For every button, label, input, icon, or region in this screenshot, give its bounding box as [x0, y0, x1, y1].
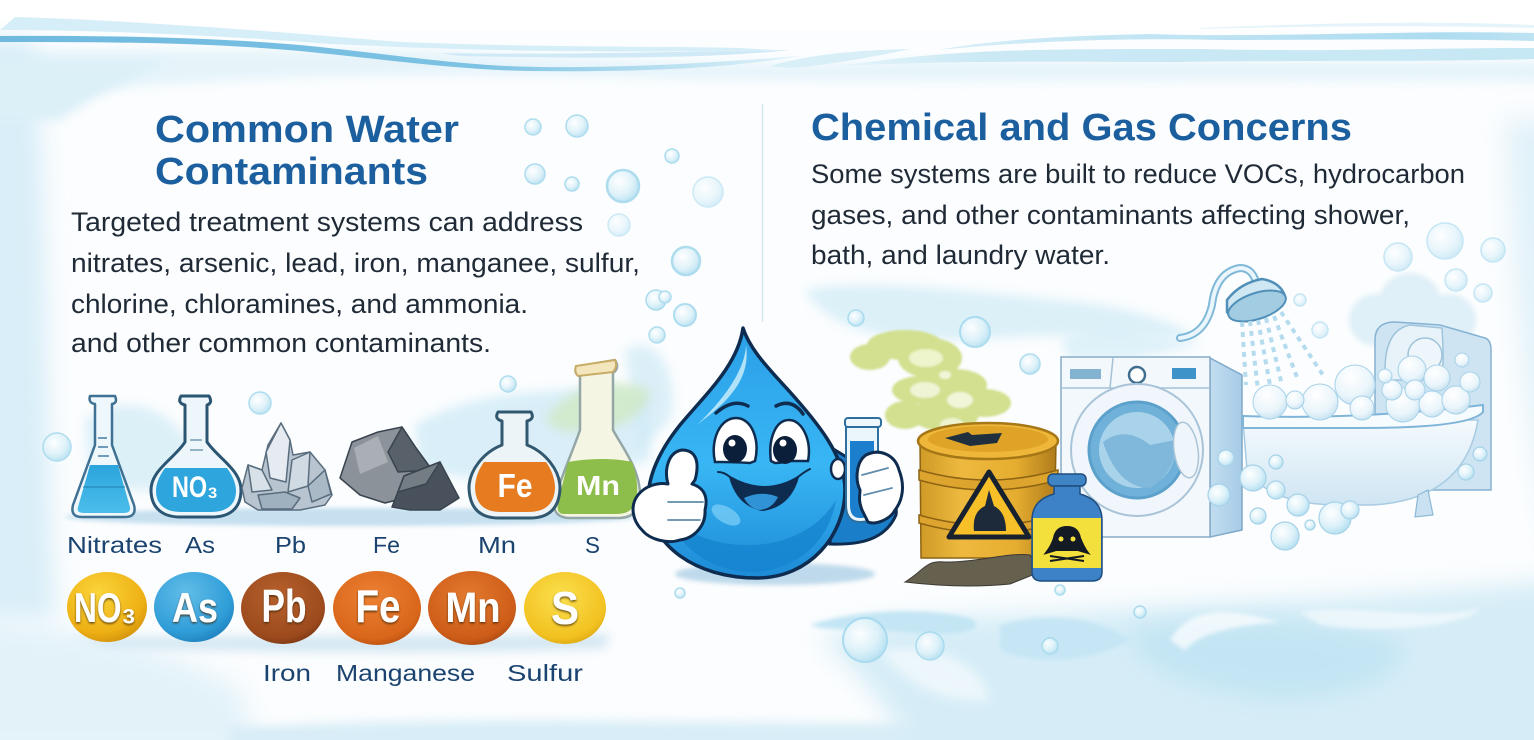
text block: targeted treatment description: chlorine, chloramines, and ammonia.: [71, 289, 528, 319]
heading: common water contaminants: Contaminants: [155, 151, 428, 193]
test tube: [845, 418, 881, 522]
floating bubbles: [43, 115, 1505, 662]
soap bubbles: [1253, 353, 1480, 422]
icon: Mn flask: Mn: [576, 470, 620, 501]
labels: symbol row: Pb: [275, 532, 306, 558]
bathtub with soap foam: [1208, 273, 1491, 550]
labels: symbol row: Mn: [478, 532, 516, 558]
text block: targeted treatment description: [71, 207, 640, 358]
text block: chemical and gas description: bath, and laundry water.: [811, 240, 1110, 270]
center divider: [762, 104, 764, 322]
sphere: As: [154, 572, 234, 642]
panel: contaminant flasks and minerals: [65, 360, 650, 526]
labels: symbol row: S: [585, 532, 600, 558]
text block: chemical and gas description: gases, and other contaminants affecting shower,: [811, 200, 1410, 230]
sphere: NO3: [67, 572, 147, 642]
floor bubbles: [1208, 447, 1487, 550]
text block: targeted treatment description: and other common contaminants.: [71, 328, 491, 358]
panel: element spheres: [67, 571, 610, 652]
gas cloud: [850, 330, 1011, 439]
icon: nitrates flask: [72, 396, 135, 517]
sphere: S: S: [551, 582, 579, 634]
icon: lead crystal cluster: [242, 423, 332, 510]
sphere: Pb: Pb: [262, 580, 306, 632]
icon: iron ore rocks: [340, 427, 459, 510]
labels: symbol row: Fe: [373, 532, 400, 558]
heading: chemical and gas concerns: Chemical and Gas Concerns: [811, 107, 1352, 149]
icon: Mn flask: [554, 360, 640, 518]
icon: poison bottle: [1032, 474, 1102, 581]
labels: symbol row: As: [185, 532, 215, 558]
sphere: NO3: NO₃: [74, 584, 136, 631]
labels: symbol row: Nitrates: [67, 532, 162, 558]
icon: hazard triangle: [949, 472, 1029, 537]
text block: targeted treatment description: nitrates, arsenic, lead, iron, manganee, sulfur,: [71, 248, 640, 278]
mascot: water drop with thumbs up and test tube: [633, 328, 902, 585]
barrel: [918, 423, 1058, 558]
heading: common water contaminants: [155, 109, 459, 193]
sphere: As: As: [172, 584, 218, 631]
icon: NO3 flask: [151, 396, 241, 517]
sphere: S: [524, 572, 606, 644]
text block: chemical and gas description: Some systems are built to reduce VOCs, hydrocarbon: [811, 159, 1465, 189]
sphere: Mn: Mn: [446, 584, 500, 632]
labels: element names: Iron: [263, 660, 311, 686]
labels: element names: [263, 660, 583, 686]
mascot face: [714, 403, 810, 510]
heading: common water contaminants: Common Water: [155, 109, 459, 151]
sphere: Mn: [428, 571, 516, 645]
icon: NO3 flask: NO₃: [172, 471, 218, 504]
labels: symbol row: [67, 532, 600, 558]
icon: Fe flask: [469, 412, 560, 518]
text block: chemical and gas description: [811, 159, 1465, 270]
icon: Fe flask: Fe: [498, 467, 532, 504]
sphere: Fe: Fe: [356, 580, 400, 632]
top water waves: [0, 17, 1534, 71]
labels: element names: Sulfur: [507, 660, 583, 686]
sludge spill: [905, 554, 1040, 586]
shower head and spray: [1180, 268, 1325, 390]
text block: targeted treatment description: Targeted treatment systems can address: [71, 207, 583, 237]
sphere: Pb: [241, 572, 325, 644]
sphere: Fe: [333, 571, 421, 645]
mascot hand: holding tube: [857, 452, 902, 523]
hazard barrel with gas cloud and bottle: [850, 330, 1102, 586]
labels: element names: Manganese: [336, 660, 475, 686]
mascot finger behind tube: [831, 459, 845, 479]
mascot hand: thumbs up: [633, 450, 706, 542]
washing machine: [1061, 357, 1242, 537]
